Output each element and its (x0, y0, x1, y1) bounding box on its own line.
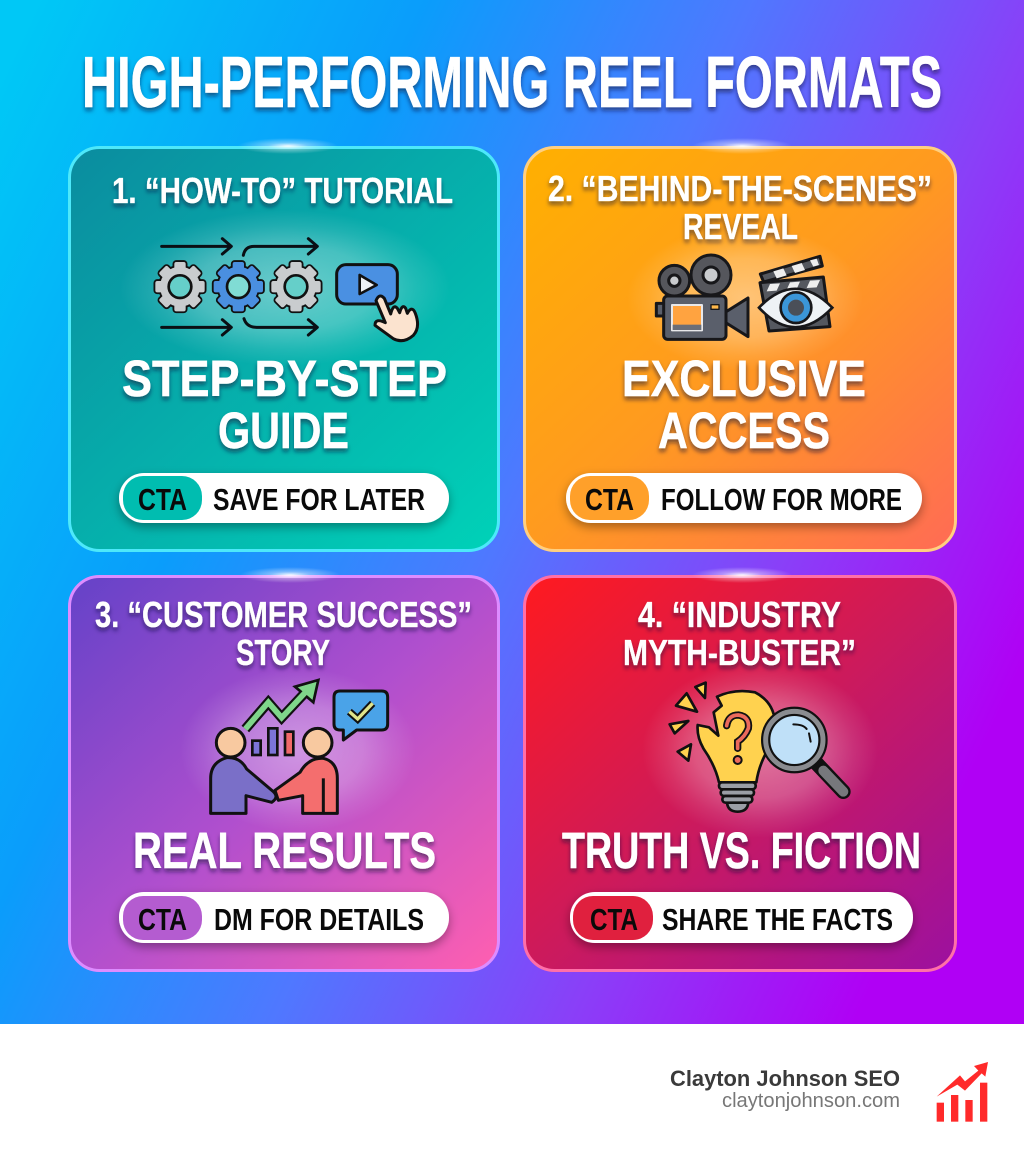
card background (524, 576, 956, 970)
icon: cracked light bulb and magnifier (670, 683, 843, 812)
icon: logo chart (937, 1062, 988, 1122)
eye (759, 289, 832, 327)
cta pill: CTA (138, 483, 187, 517)
brand name: Clayton Johnson SEO (670, 1066, 900, 1091)
gear three (271, 262, 321, 311)
question mark (727, 715, 749, 764)
cta pill (119, 892, 449, 943)
top glow (240, 567, 340, 583)
icon glow (120, 210, 450, 366)
cta pill (119, 473, 449, 523)
person right (275, 728, 337, 813)
cta pill: FOLLOW FOR MORE (661, 483, 902, 517)
card background (524, 148, 956, 550)
card background (70, 576, 498, 970)
bars (252, 728, 293, 755)
main label: STEP-BY-STEP (122, 350, 447, 407)
panel: how-to tutorial (70, 138, 498, 550)
growth arrow (245, 680, 318, 729)
cta pill: CTA (585, 483, 634, 517)
play button (337, 265, 397, 304)
cta pill: DM FOR DETAILS (214, 903, 424, 937)
main label: EXCLUSIVE (622, 350, 866, 407)
top glow (692, 567, 792, 583)
cta pill (570, 892, 913, 943)
top glow (692, 138, 792, 154)
main label: REAL RESULTS (133, 822, 436, 879)
icon: film camera and clapperboard eye (656, 255, 832, 339)
top glow (238, 138, 338, 154)
icon glow (642, 662, 878, 838)
card heading: 2. “BEHIND-THE-SCENES” (548, 168, 932, 209)
icon glow (627, 226, 863, 370)
main label: ACCESS (658, 402, 830, 459)
card heading: MYTH-BUSTER” (623, 632, 856, 673)
gear two (214, 262, 263, 311)
website: claytonjohnson.com (722, 1090, 900, 1112)
panel: behind-the-scenes reveal (524, 138, 956, 550)
bulb (698, 691, 775, 782)
magnifier (766, 711, 843, 792)
footer background (0, 1024, 1024, 1154)
arrows (162, 239, 317, 335)
cta pill: CTA (590, 903, 638, 937)
speech bubble with check (334, 691, 388, 740)
card heading: 1. “HOW-TO” TUTORIAL (112, 170, 453, 211)
panel: customer success story (70, 567, 498, 970)
film camera (656, 255, 748, 339)
footer (0, 1024, 1024, 1154)
card heading (623, 594, 856, 673)
main label (622, 350, 866, 459)
cta pill: SAVE FOR LATER (213, 483, 425, 517)
person left (211, 728, 276, 813)
cta pill: CTA (138, 903, 187, 937)
gear one (155, 262, 205, 311)
pointing hand (375, 296, 418, 341)
card heading (95, 594, 472, 673)
icon: gears, arrows and play button (155, 239, 418, 341)
icon glow (180, 668, 416, 832)
bulb base (719, 782, 756, 812)
card heading: 4. “INDUSTRY (638, 594, 841, 635)
card heading: STORY (236, 632, 330, 673)
cta pill (566, 473, 922, 523)
shards (670, 683, 706, 761)
main label (122, 350, 447, 459)
panel: industry myth-buster (524, 567, 956, 970)
icon: handshake with growth chart (211, 680, 388, 813)
card background (70, 148, 498, 550)
card heading (548, 168, 932, 247)
main label: GUIDE (218, 402, 349, 459)
card heading: 3. “CUSTOMER SUCCESS” (95, 594, 472, 635)
clapperboard (760, 256, 830, 331)
cta pill: SHARE THE FACTS (662, 903, 893, 937)
card heading: REVEAL (683, 206, 798, 247)
